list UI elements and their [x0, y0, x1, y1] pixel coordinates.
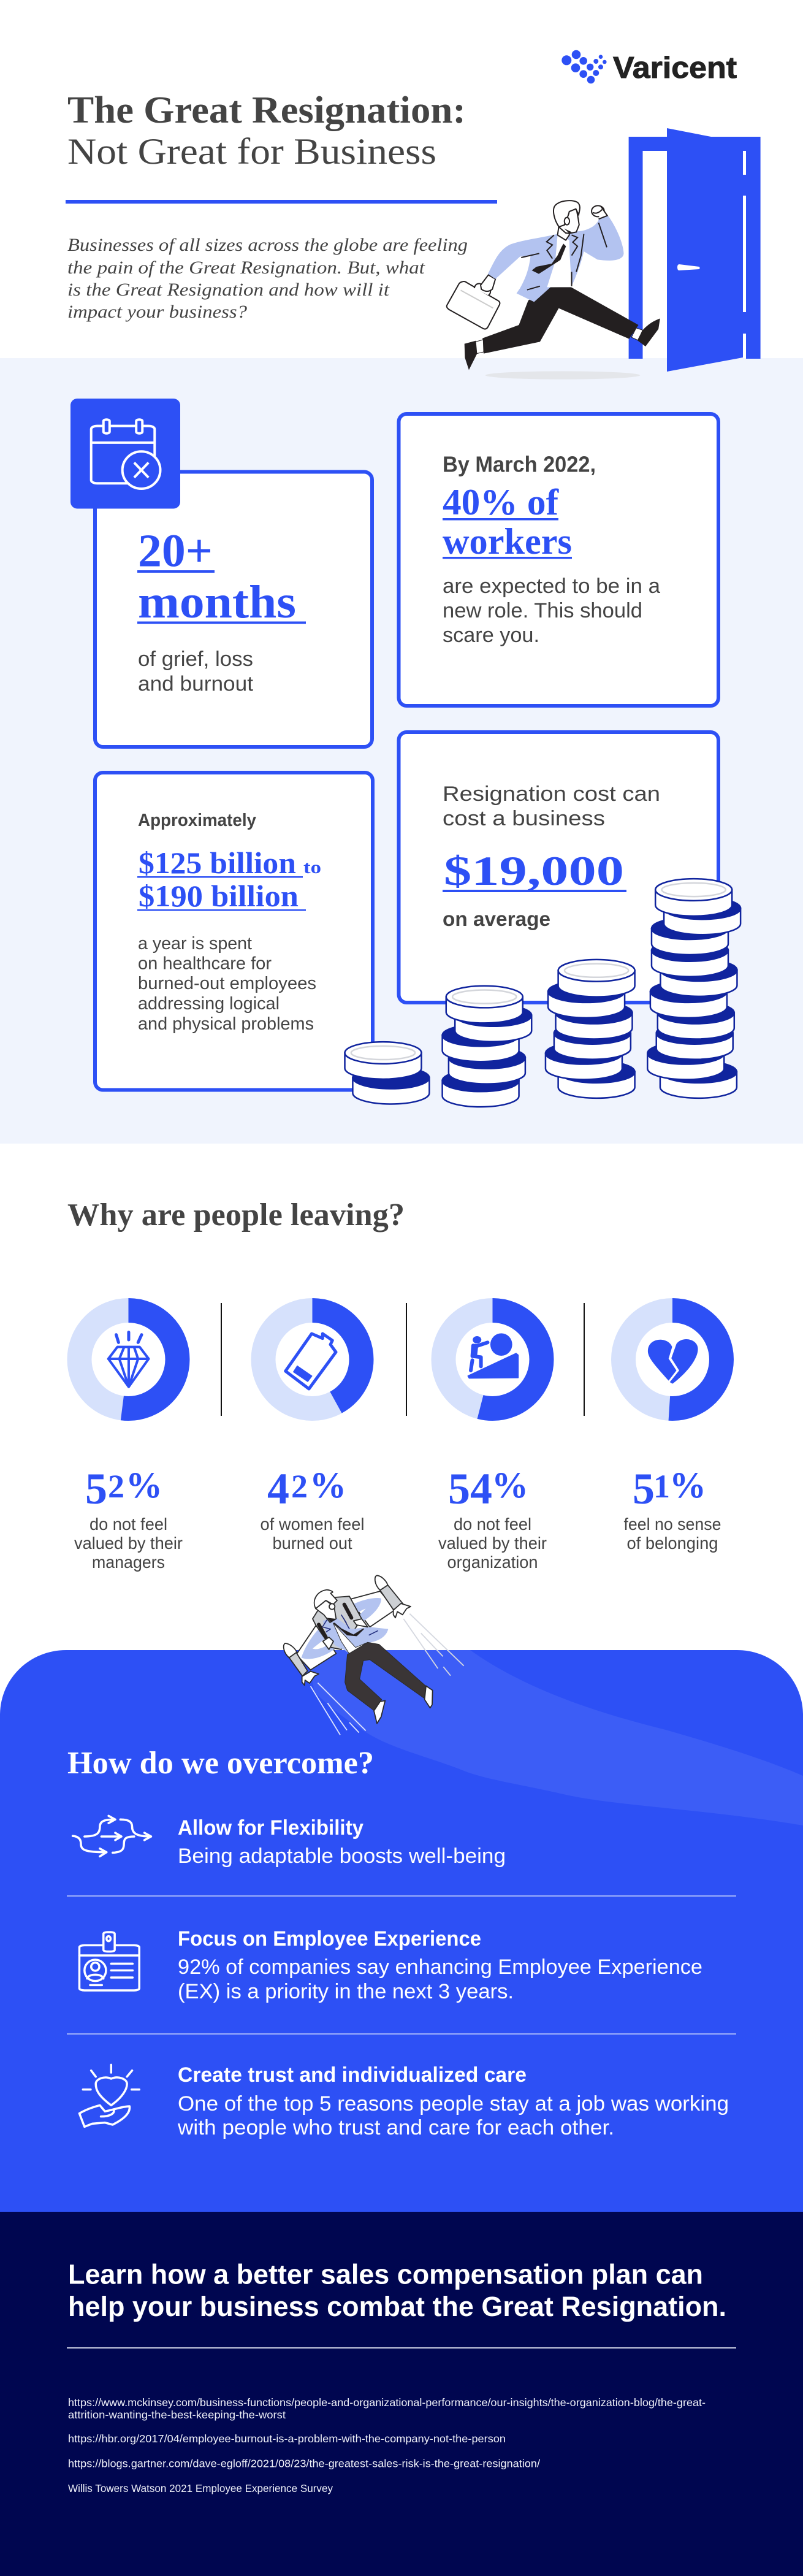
stat: 54% do not feel valued by their organization: 4 — [470, 1464, 492, 1513]
description: One of the top 5 reasons people stay at a job was working — [178, 2092, 729, 2115]
caption: organization — [447, 1553, 538, 1572]
panel: footer — [0, 2212, 803, 2576]
chart: 42% donut — [264, 1310, 362, 1408]
text block: intro: Businesses of all sizes across the globe are feeling — [67, 235, 468, 255]
stat: 42% of women feel burned out: 4 — [267, 1464, 289, 1513]
heading: Allow for Flexibility — [178, 1816, 363, 1840]
icon: heart in hand — [79, 2065, 139, 2127]
stat: $125 billion to $190 billion — [137, 846, 321, 913]
chart: 52% donut — [80, 1310, 178, 1408]
description — [443, 575, 660, 647]
lead-in: Resignation cost can — [443, 782, 660, 806]
icon: branching arrows — [73, 1816, 151, 1856]
icon: diamond — [108, 1332, 148, 1387]
panel: how do we overcome — [0, 1650, 803, 2212]
title: Not Great for Business — [67, 131, 436, 172]
stat: $125 billion to $190 billion: $190 billion — [139, 879, 299, 913]
icon: broken heart — [648, 1339, 698, 1384]
description: new role. This should — [443, 599, 642, 622]
stat: 52% do not feel valued by their managers: 5 — [85, 1464, 107, 1513]
stat: 52% do not feel valued by their managers — [74, 1464, 183, 1572]
references: https://blogs.gartner.com/dave-egloff/2021/08/23/the-greatest-sales-risk-is-the-great-resignation/ — [68, 2458, 540, 2470]
icon: pushing boulder uphill — [468, 1333, 518, 1378]
icon: logo dots — [561, 50, 607, 83]
lead-in: By March 2022, — [443, 451, 596, 477]
title: The Great Resignation: — [67, 90, 466, 131]
divider lines — [221, 1303, 585, 1416]
chart: 51% donut — [623, 1310, 721, 1408]
illustration: coin stacks — [344, 879, 740, 1107]
description: and burnout — [138, 672, 254, 695]
text block: intro: the pain of the Great Resignation. But, what — [67, 258, 425, 278]
references — [68, 2396, 706, 2494]
call to action: Learn how a better sales compensation plan can — [68, 2259, 703, 2290]
lead-in: Approximately — [138, 811, 256, 830]
text block: intro: impact your business? — [67, 302, 247, 322]
lead-in — [443, 782, 660, 830]
stat: 51% feel no sense of belonging: % — [669, 1465, 706, 1505]
item: create trust and individualized care — [79, 2063, 729, 2139]
caption — [260, 1515, 364, 1553]
stat: 20+ months: 20+ — [138, 525, 213, 576]
caption: managers — [92, 1553, 165, 1572]
references: Willis Towers Watson 2021 Employee Experience Survey — [68, 2482, 333, 2494]
description: a year is spent — [138, 934, 252, 954]
item: focus on employee experience — [79, 1927, 702, 2003]
description: scare you. — [443, 624, 539, 647]
description — [177, 2092, 729, 2139]
illustration: running businessman — [447, 201, 660, 380]
caption: do not feel — [454, 1515, 531, 1534]
stat: 54% do not feel valued by their organization — [438, 1464, 547, 1572]
stat: 51% feel no sense of belonging: 1 — [653, 1468, 670, 1505]
icon: id badge — [79, 1932, 139, 1990]
stat: $19,000: $19,000 — [444, 847, 624, 894]
description: Being adaptable boosts well-being — [178, 1844, 506, 1868]
references: attrition-wanting-the-best-keeping-the-worst — [68, 2409, 286, 2421]
stat: $125 billion to $190 billion: to — [303, 857, 321, 877]
description: 92% of companies say enhancing Employee Experience — [178, 1955, 702, 1979]
references: https://hbr.org/2017/04/employee-burnout-is-a-problem-with-the-company-not-the-person — [68, 2433, 506, 2445]
description — [138, 934, 316, 1034]
caption — [438, 1515, 547, 1572]
description: addressing logical — [138, 994, 280, 1014]
call to action — [68, 2259, 726, 2322]
stat: $125 billion to $190 billion: $125 billion — [139, 846, 296, 880]
item: allow for flexibility — [73, 1816, 506, 1868]
heading: Focus on Employee Experience — [178, 1927, 481, 1951]
caption: valued by their — [74, 1534, 183, 1553]
light trail behind flyer — [306, 1650, 803, 1825]
caption: feel no sense — [624, 1515, 721, 1534]
stat: 52% do not feel valued by their managers: % — [126, 1465, 162, 1505]
description: of grief, loss — [138, 648, 253, 671]
stat: 20+ months — [137, 525, 306, 628]
call to action: help your business combat the Great Resignation. — [68, 2291, 726, 2322]
icon: calendar with x — [70, 399, 180, 509]
caption: burned out — [272, 1534, 352, 1553]
lead-in: cost a business — [443, 807, 605, 830]
chart: 54% donut — [444, 1310, 542, 1408]
title rule — [66, 200, 497, 204]
description: are expected to be in a — [443, 575, 660, 598]
stat: 42% of women feel burned out — [260, 1464, 364, 1553]
stat: 52% do not feel valued by their managers: 2 — [108, 1468, 124, 1505]
stat: 54% do not feel valued by their organization: 5 — [448, 1464, 470, 1513]
heading: how do we overcome: How do we overcome? — [67, 1746, 374, 1781]
caption — [74, 1515, 183, 1572]
description: on healthcare for — [138, 954, 272, 974]
stat: 51% feel no sense of belonging: 5 — [633, 1464, 655, 1513]
stat: 20+ months: months — [138, 576, 296, 628]
description: (EX) is a priority in the next 3 years. — [178, 1980, 514, 2003]
stat: 40% of workers: 40% of — [443, 482, 559, 522]
description — [138, 648, 254, 695]
caption — [624, 1515, 721, 1553]
stat: 40% of workers: workers — [443, 521, 572, 562]
icon: low battery — [286, 1334, 336, 1389]
heading: why are people leaving: Why are people leaving? — [67, 1198, 405, 1233]
logo wordmark: Varicent — [613, 52, 737, 85]
stat: 40% of workers — [443, 482, 572, 562]
panel: 20+ months — [95, 472, 372, 747]
stat: 54% do not feel valued by their organization: % — [492, 1465, 528, 1505]
caption: of women feel — [260, 1515, 364, 1534]
description — [178, 1955, 702, 2003]
note: on average — [443, 908, 550, 930]
caption: of belonging — [626, 1534, 718, 1553]
description: with people who trust and care for each other. — [177, 2116, 614, 2139]
text block: intro: is the Great Resignation and how will it — [67, 280, 390, 300]
panel: resignation cost — [398, 732, 718, 1003]
description: burned-out employees — [138, 974, 316, 993]
panel: healthcare cost — [95, 773, 373, 1090]
references: https://www.mckinsey.com/business-functions/people-and-organizational-performance/our-insights/the-organization-blog/the-great- — [68, 2396, 706, 2409]
caption: valued by their — [438, 1534, 547, 1553]
caption: do not feel — [89, 1515, 167, 1534]
title — [67, 90, 466, 172]
text block: intro — [67, 235, 468, 322]
panel: 40% of workers — [398, 414, 718, 706]
heading: Create trust and individualized care — [178, 2063, 527, 2087]
description: and physical problems — [138, 1014, 314, 1034]
stat: 42% of women feel burned out: 2 — [291, 1468, 308, 1505]
illustration: open door — [629, 128, 761, 372]
panel: stats background band — [0, 358, 803, 1144]
logo: Varicent — [561, 50, 737, 85]
illustration: rocket-pack flyer — [284, 1575, 464, 1735]
stat: 51% feel no sense of belonging — [624, 1464, 721, 1553]
stat: 42% of women feel burned out: % — [310, 1465, 346, 1505]
